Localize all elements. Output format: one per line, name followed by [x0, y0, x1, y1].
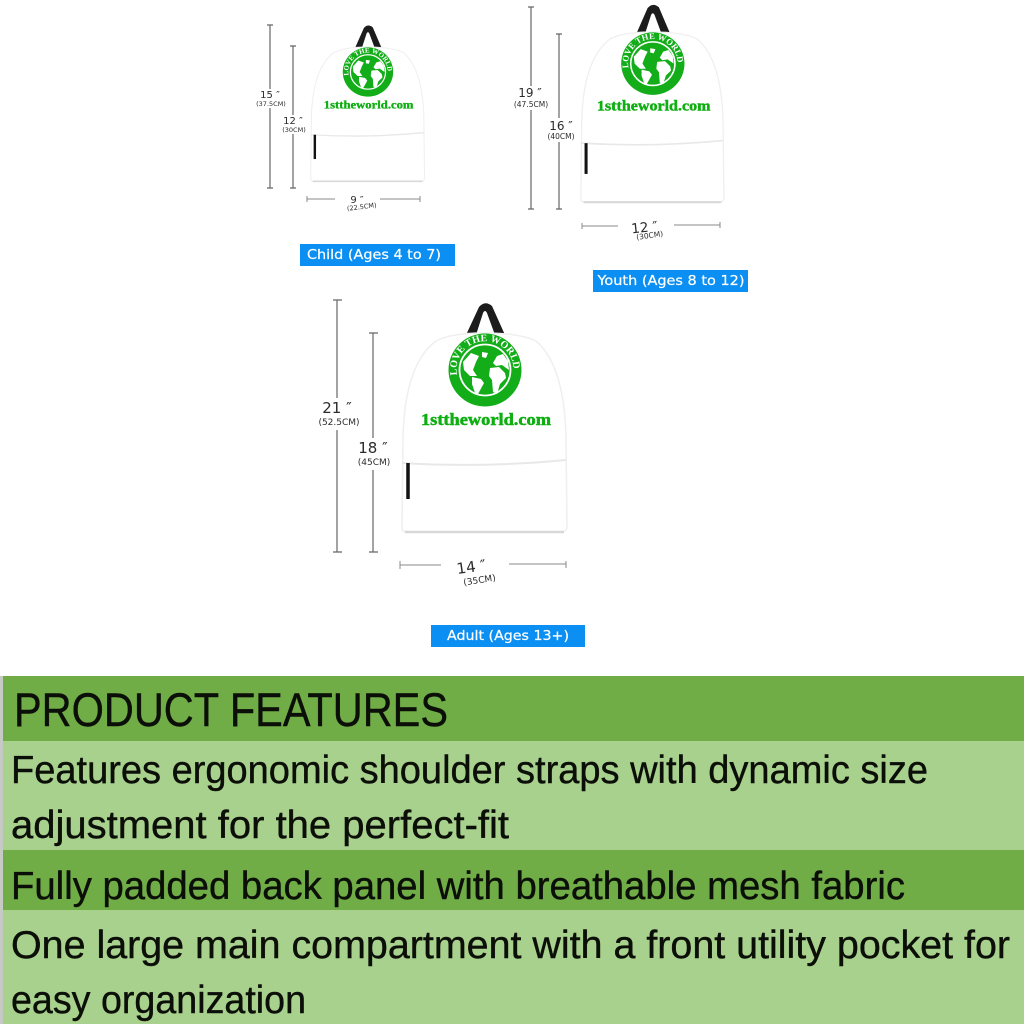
panel: child backpack size — [256, 24, 455, 266]
dimension: youth width 12 inches: (30CM) — [636, 229, 664, 242]
dimension: youth body 16 inches: (40CM) — [547, 132, 575, 141]
backpack: adult — [402, 303, 568, 534]
label: youth ages: Youth (Ages 8 to 12) — [596, 274, 744, 289]
dimension: youth body 16 inches — [547, 34, 575, 209]
heading: product features — [3, 676, 1024, 741]
dimension: child body 12 inches — [282, 46, 306, 188]
dimension: adult height 21 inches — [318, 300, 360, 552]
backpack: adult: LOVE THE WORLD — [450, 334, 520, 376]
panel: youth backpack size — [514, 4, 748, 292]
dimension: youth height 19 inches: 19 ″ — [518, 86, 542, 100]
feature row: back panel — [3, 850, 1024, 910]
dimension: child height 15 inches: 15 ″ — [260, 90, 280, 101]
dimension: adult width 14 inches: (35CM) — [463, 574, 497, 589]
backpack: adult: 1sttheworld.com — [421, 410, 551, 429]
dimension: child height 15 inches — [256, 25, 286, 188]
dimension: child body 12 inches: (30CM) — [282, 126, 306, 134]
dimension: adult height 21 inches: (52.5CM) — [318, 418, 360, 428]
backpack: youth: LOVE THE WORLD — [622, 33, 683, 68]
dimension: child width 9 inches: (22.5CM) — [347, 201, 377, 213]
dimension: youth width 12 inches — [582, 219, 720, 242]
label: adult ages — [431, 625, 585, 647]
dimension: child height 15 inches: (37.5CM) — [256, 100, 286, 108]
label: adult ages: Adult (Ages 13+) — [447, 629, 569, 644]
dimension: adult width 14 inches — [400, 556, 566, 589]
label: child ages — [300, 244, 455, 266]
dimension: adult body 18 inches: 18 ″ — [358, 439, 388, 457]
dimension: child width 9 inches — [307, 195, 420, 213]
backpack: child: 1sttheworld.com — [324, 99, 414, 111]
panel: adult backpack size — [318, 299, 585, 647]
backpack: child — [310, 26, 425, 182]
panel: product features table — [0, 676, 1024, 1024]
label: youth ages — [593, 270, 748, 292]
feature row: main compartment — [3, 910, 1024, 1024]
backpack: youth — [580, 4, 724, 204]
dimension: adult width 14 inches: 14 ″ — [455, 556, 488, 578]
dimension: adult body 18 inches — [358, 333, 390, 552]
feature row: main compartment: One large main compartment with a front utility pocket for — [11, 924, 1010, 967]
backpack: youth: 1sttheworld.com — [597, 99, 710, 115]
dimension: child body 12 inches: 12 ″ — [283, 116, 303, 127]
dimension: youth height 19 inches — [514, 7, 548, 209]
feature row: shoulder straps: adjustment for the perfect-fit — [11, 804, 509, 847]
dimension: child width 9 inches: 9 ″ — [350, 195, 364, 206]
feature row: shoulder straps — [3, 741, 1024, 850]
dimension: youth width 12 inches: 12 ″ — [631, 219, 659, 237]
heading: product features: PRODUCT FEATURES — [14, 683, 448, 736]
feature row: main compartment: easy organization — [11, 979, 306, 1022]
feature row: shoulder straps: Features ergonomic shoulder straps with dynamic size — [11, 749, 928, 792]
backpack: child: LOVE THE WORLD — [344, 48, 392, 76]
dimension: youth body 16 inches: 16 ″ — [549, 119, 573, 133]
dimension: youth height 19 inches: (47.5CM) — [514, 100, 548, 109]
dimension: adult height 21 inches: 21 ″ — [322, 399, 352, 417]
label: child ages: Child (Ages 4 to 7) — [307, 248, 441, 263]
dimension: adult body 18 inches: (45CM) — [358, 458, 390, 468]
feature row: back panel: Fully padded back panel with breathable mesh fabric — [11, 865, 905, 908]
